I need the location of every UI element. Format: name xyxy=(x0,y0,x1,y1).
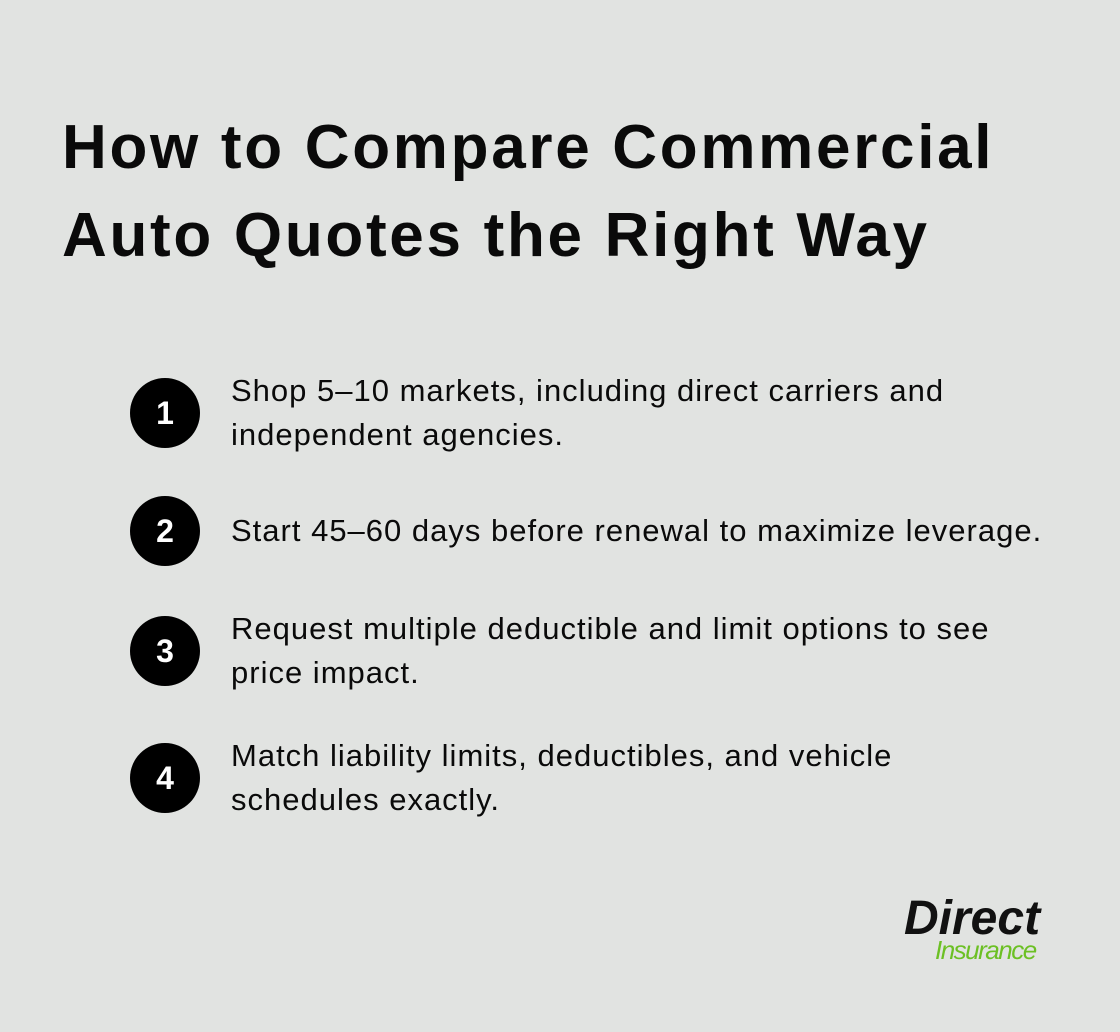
text 1 xyxy=(231,373,944,452)
text 1: independent agencies. xyxy=(231,417,564,452)
text 1: Shop 5–10 markets, including direct carriers and xyxy=(231,373,944,408)
text 2: Start 45–60 days before renewal to maximize leverage. xyxy=(231,513,1042,548)
number 3: 3 xyxy=(156,633,174,669)
title xyxy=(62,113,994,270)
logo: Direct xyxy=(904,892,1040,945)
logo: Insurance xyxy=(935,935,1036,965)
item 4 xyxy=(130,738,892,817)
number 3 xyxy=(130,616,200,686)
number 1: 1 xyxy=(156,395,174,431)
number 2: 2 xyxy=(156,513,174,549)
number 2 xyxy=(130,496,200,566)
text 3: price impact. xyxy=(231,655,420,690)
number 4 xyxy=(130,743,200,813)
text 4: schedules exactly. xyxy=(231,782,500,817)
item 1 xyxy=(130,373,944,452)
number 4: 4 xyxy=(156,760,174,796)
number 1 xyxy=(130,378,200,448)
text 3 xyxy=(231,611,990,690)
text 4 xyxy=(231,738,892,817)
text 4: Match liability limits, deductibles, and vehicle xyxy=(231,738,892,773)
title: How to Compare Commercial xyxy=(62,113,994,182)
item 3 xyxy=(130,611,990,690)
item 2 xyxy=(130,496,1042,566)
text 3: Request multiple deductible and limit options to see xyxy=(231,611,990,646)
title: Auto Quotes the Right Way xyxy=(62,201,930,270)
